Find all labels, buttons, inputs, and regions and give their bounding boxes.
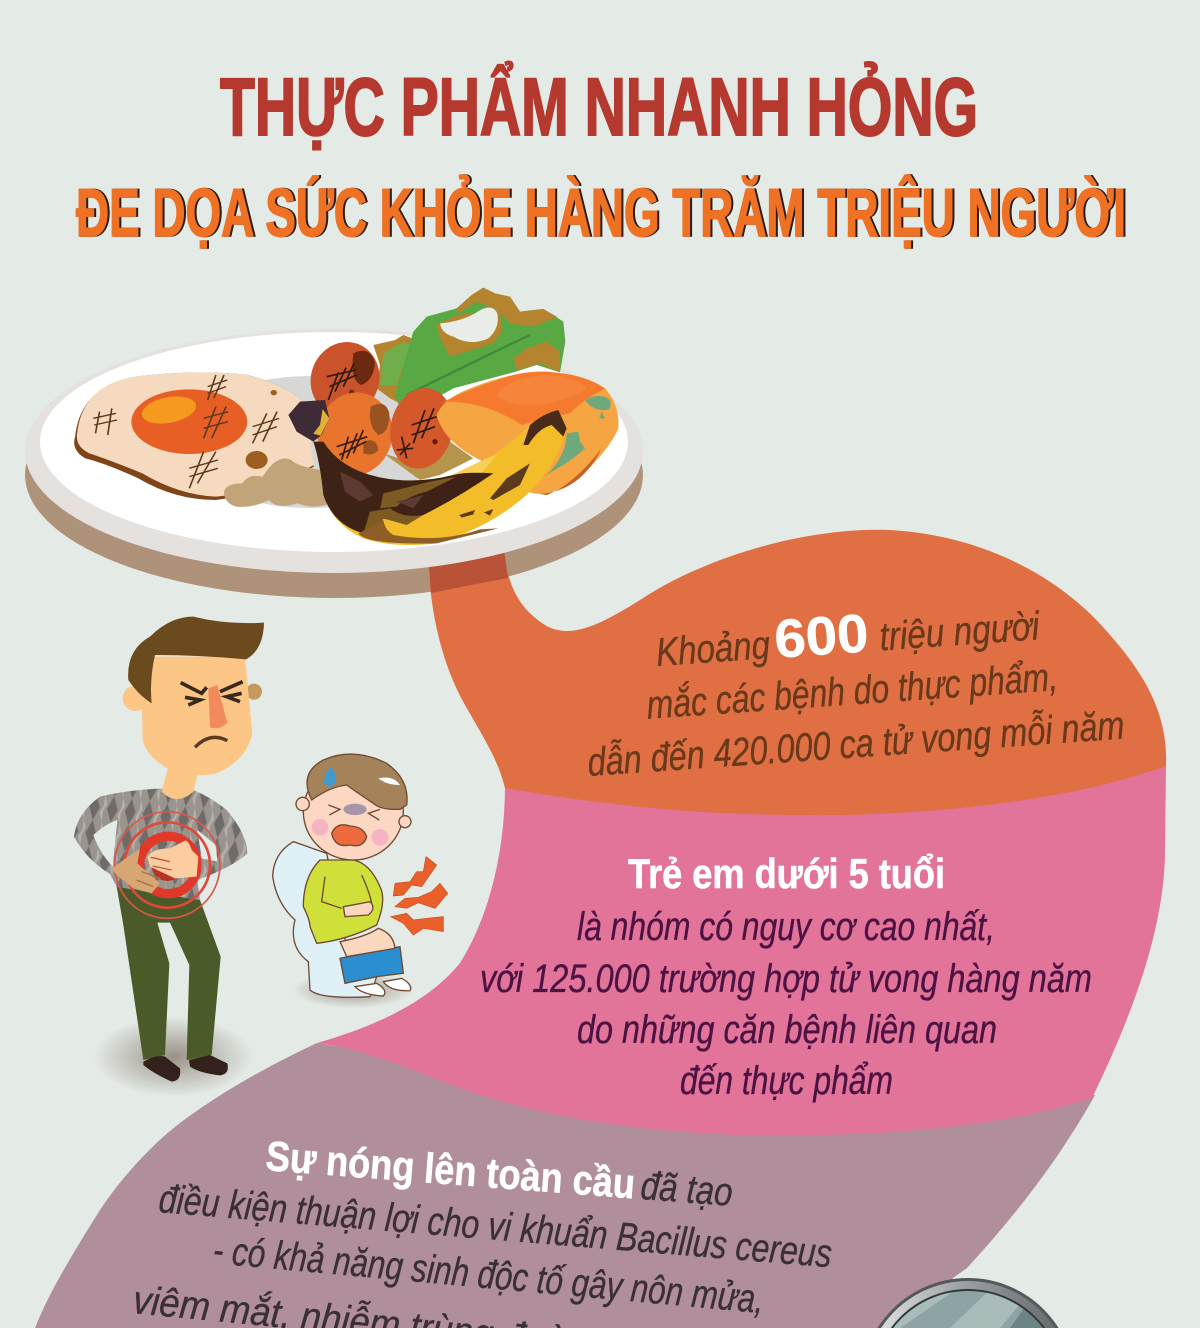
lettuce rot (437, 288, 560, 372)
hair (307, 754, 407, 809)
shirt arm lines (322, 875, 372, 908)
text: orange section (578, 586, 1126, 785)
lens rim (861, 1278, 1075, 1328)
mouth (332, 825, 367, 846)
magnifying lens (878, 1278, 1058, 1328)
face (142, 657, 252, 775)
right hand (147, 841, 198, 878)
knees (340, 928, 395, 957)
banana (288, 400, 567, 545)
egg and scraps (74, 372, 330, 507)
mushy scraps (224, 459, 330, 507)
man holding stomach (74, 617, 264, 1097)
eyes (328, 805, 380, 820)
arm gap left (93, 820, 117, 867)
là nhóm có nguy cơ cao nhất: là nhóm có nguy cơ cao nhất, (577, 905, 995, 949)
do những căn bệnh liên quan: do những căn bệnh liên quan (577, 1008, 997, 1052)
fried egg (74, 372, 314, 500)
lettuce hole (440, 307, 498, 342)
plate surface (40, 332, 628, 552)
hair highlight (378, 777, 400, 785)
brows and eyes (181, 682, 243, 705)
tomato back (300, 332, 390, 426)
ears (123, 686, 148, 711)
sweater (74, 788, 247, 900)
nose (208, 685, 227, 728)
plate inner well (180, 376, 440, 508)
cheeks (312, 819, 328, 836)
right hand fingers (151, 857, 172, 870)
sweat drop (324, 767, 336, 787)
shirt (303, 860, 383, 943)
stomach illustration (35, 530, 1166, 1328)
stomach section: orange neck and body (428, 530, 1166, 815)
left hand (112, 848, 160, 893)
neck (162, 767, 198, 799)
Trẻ em dưới 5 tuổi: Trẻ em dưới 5 tuổi (628, 850, 945, 897)
điều kiện thuận lợi cho vi khuẩn Bacillus cereus: điều kiện thuận lợi cho vi khuẩn Bacillus cereus (157, 1177, 834, 1276)
pain zigzags (391, 857, 448, 935)
mouth (195, 737, 227, 747)
shoes (143, 1055, 228, 1082)
toilet shadow (293, 972, 413, 1008)
Khoảng 600 triệu người (654, 591, 1042, 678)
plate underside (25, 352, 643, 598)
stomach section: pink (317, 760, 1166, 1135)
plate rim (25, 329, 643, 573)
pain rings (115, 812, 220, 918)
mango (437, 372, 618, 495)
head (303, 763, 403, 860)
Sự nóng lên toàn cầu đã tạo: đã tạo (639, 1164, 734, 1215)
left hand fingers (137, 872, 160, 887)
lens glass (893, 1291, 1043, 1328)
đến thực phẩm: đến thực phẩm (680, 1059, 893, 1103)
boy on toilet (273, 754, 448, 1008)
Khoảng 600 triệu người: 600 (772, 603, 870, 670)
stomach section: mauve (35, 1043, 1095, 1328)
rotted scrap under mango (383, 442, 473, 480)
plate (25, 329, 643, 573)
Sự nóng lên toàn cầu đã tạo: Sự nóng lên toàn cầu (264, 1132, 637, 1207)
hands (343, 902, 373, 917)
hair (128, 617, 264, 703)
text: mauve section (131, 1132, 834, 1328)
toilet tank and bowl (273, 842, 380, 997)
mắc các bệnh do thực phẩm: mắc các bệnh do thực phẩm, (645, 654, 1059, 728)
feet (355, 978, 411, 996)
lettuce vein (407, 335, 530, 395)
Khoảng 600 triệu người: triệu người (878, 604, 1042, 659)
shorts (340, 947, 403, 983)
Khoảng 600 triệu người: Khoảng (655, 623, 771, 675)
trousers (117, 887, 221, 1060)
rotten food pile (288, 288, 618, 545)
neck shadow (428, 550, 508, 593)
tomato right (383, 382, 460, 475)
tomato front (310, 385, 400, 483)
ground shadow (93, 1017, 253, 1097)
lettuce small leaf green (380, 342, 420, 385)
lettuce small leaf (373, 335, 428, 403)
lettuce main leaf (395, 288, 565, 417)
nose bruise (343, 804, 367, 815)
arm gap right (197, 830, 217, 862)
text: pink section (480, 850, 1092, 1103)
